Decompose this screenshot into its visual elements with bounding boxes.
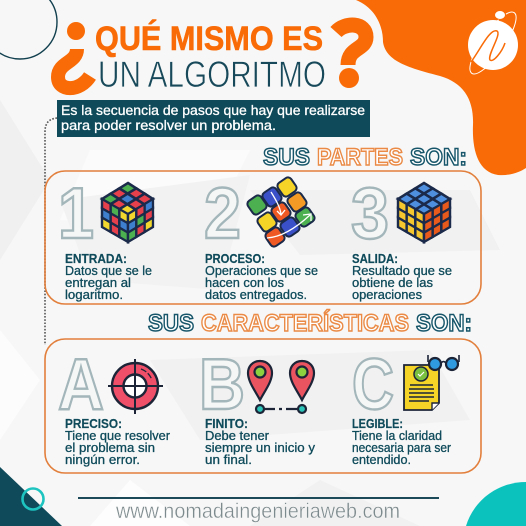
- letter C: C: [352, 345, 394, 425]
- definition box: para poder resolver un problema.: [61, 117, 276, 133]
- dark corner triangle: [0, 467, 62, 526]
- definition box: Es la secuencia de pasos que hay que realizarse: [61, 102, 365, 118]
- number 3: 3: [351, 174, 389, 254]
- text: finito: Debe tener: [205, 428, 270, 443]
- logo: [463, 6, 523, 80]
- text: proceso: [205, 251, 318, 302]
- text: salida: Resultado que se: [352, 263, 452, 278]
- text: preciso: el problema sin: [65, 440, 155, 455]
- title: QUÉ MISMO ES: [95, 20, 323, 58]
- heading: sus partes son: PARTES: [317, 144, 403, 171]
- icon: document with glasses: [404, 355, 459, 410]
- question mark: [336, 25, 366, 88]
- text: entrada: logaritmo.: [65, 287, 123, 302]
- icon: target: [108, 359, 163, 414]
- icon: tilted cube: [246, 176, 316, 248]
- decorative ring top left: [0, 0, 57, 59]
- panel: partes: [45, 171, 481, 304]
- teal corner circle: [466, 482, 526, 526]
- heading: sus partes son: [263, 144, 467, 171]
- letter B: B: [199, 345, 245, 425]
- text: finito: FINITO:: [205, 416, 248, 431]
- text: entrada: Datos que se le: [65, 263, 152, 278]
- text: proceso: PROCESO:: [205, 251, 265, 266]
- text: salida: operaciones: [352, 287, 422, 302]
- teal ring: [22, 488, 44, 510]
- heading: sus caracteristicas son: SUS: [148, 310, 194, 337]
- text: entrada: entregan al: [65, 275, 131, 290]
- letter A: A: [58, 345, 104, 425]
- text: legible: necesaria para ser: [352, 440, 452, 455]
- icon: route pins: [248, 361, 314, 413]
- text: preciso: [65, 416, 171, 467]
- text: proceso: hacen con los: [205, 275, 284, 290]
- text: salida: SALIDA:: [352, 251, 398, 266]
- heading: sus caracteristicas son: CARACTERÍSTICAS: [201, 309, 409, 337]
- text: entrada: [65, 251, 152, 302]
- orange blob top right: [356, 0, 526, 175]
- text: preciso: PRECISO:: [65, 416, 122, 431]
- text: proceso: Operaciones que se: [205, 263, 318, 278]
- text: proceso: datos entregados.: [205, 287, 307, 302]
- inverted question mark: [58, 22, 90, 88]
- definition box: [57, 100, 370, 137]
- title: [95, 20, 326, 95]
- text: preciso: ningún error.: [65, 452, 140, 467]
- number 1: 1: [58, 174, 94, 254]
- text: legible: LEGIBLE:: [352, 416, 403, 431]
- icon: solved cube: [398, 183, 450, 242]
- text: finito: siempre un inicio y: [205, 440, 316, 455]
- text: preciso: Tiene que resolver: [65, 428, 171, 443]
- footer rule: [78, 497, 439, 499]
- text: salida: obtiene de las: [352, 275, 433, 290]
- website url: www.nomadaingenieriaweb.com: [115, 500, 400, 523]
- text: legible: entendido.: [352, 452, 411, 467]
- text: legible: [352, 416, 452, 467]
- panel: caracteristicas: [45, 339, 481, 473]
- text: finito: un final.: [205, 452, 252, 467]
- number 2: 2: [204, 174, 241, 254]
- text: finito: [205, 416, 316, 467]
- text: legible: Tiene la claridad: [352, 428, 442, 443]
- heading: sus caracteristicas son: SON:: [416, 310, 472, 337]
- icon: multicolor cube: [102, 183, 153, 242]
- heading: sus partes son: SUS: [263, 144, 310, 171]
- heading: sus caracteristicas son: [148, 309, 472, 337]
- text: entrada: ENTRADA:: [65, 251, 127, 266]
- text: salida: [352, 251, 452, 302]
- title: UN ALGORITMO: [98, 54, 326, 95]
- dotted connector: [45, 118, 57, 345]
- heading: sus partes son: SON:: [410, 144, 467, 171]
